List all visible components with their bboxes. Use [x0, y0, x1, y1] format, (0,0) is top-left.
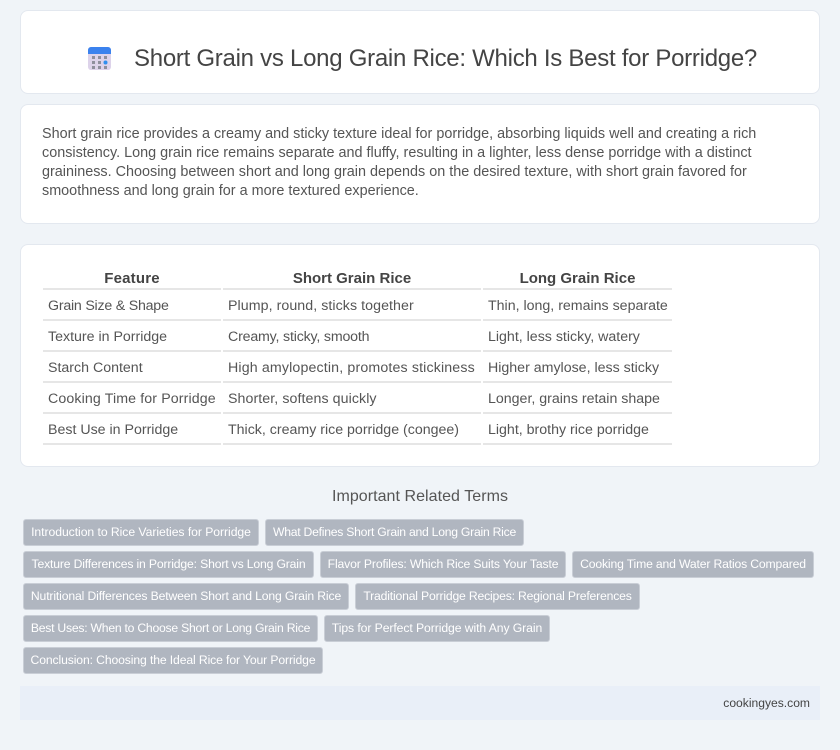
table row: starch	[48, 360, 659, 376]
table header	[104, 270, 635, 287]
tag list: What Defines Short Grain and Long Grain Rice	[273, 525, 516, 539]
table row: texture: Texture in Porridge	[48, 329, 167, 345]
table header: Long Grain Rice	[520, 270, 635, 287]
panel: title header	[20, 10, 820, 94]
table row: best use: Thick, creamy rice porridge (congee)	[228, 422, 459, 438]
table row: cooking time	[48, 391, 660, 407]
panel: introduction text: Short grain rice provides a creamy and sticky texture ideal for porridge, absorbing liquids well and creating a rich	[42, 126, 756, 142]
panel: introduction text: graininess. Choosing between short and long grain depends on the desired texture, with short grain favored for	[42, 164, 747, 180]
table row: best use	[48, 422, 649, 438]
tag list	[23, 519, 814, 674]
icon: calendar	[88, 47, 111, 70]
table row: starch: Higher amylose, less sticky	[488, 360, 659, 376]
table row: grain size	[48, 298, 668, 314]
table row: best use: Best Use in Porridge	[48, 422, 178, 438]
tag list: Cooking Time and Water Ratios Compared	[580, 557, 806, 571]
tag list: Nutritional Differences Between Short and Long Grain Rice	[31, 589, 341, 603]
panel: introduction text	[20, 104, 820, 224]
table row: cooking time: Cooking Time for Porridge	[48, 391, 216, 407]
table row: grain size: Thin, long, remains separate	[488, 298, 668, 314]
panel: introduction text: smoothness and long grain for a more textured experience.	[42, 183, 419, 199]
tag list: Traditional Porridge Recipes: Regional Preferences	[363, 589, 632, 603]
table row: texture: Creamy, sticky, smooth	[228, 329, 369, 345]
footer source: cookingyes.com	[723, 696, 810, 710]
table row: texture	[48, 329, 640, 345]
tag list: Introduction to Rice Varieties for Porridge	[31, 525, 251, 539]
table row: starch: High amylopectin, promotes stickiness	[228, 360, 475, 376]
heading: related terms: Important Related Terms	[332, 488, 508, 505]
tag list: Flavor Profiles: Which Rice Suits Your Taste	[328, 557, 558, 571]
tag list: Texture Differences in Porridge: Short vs Long Grain	[32, 557, 305, 571]
table header: Short Grain Rice	[293, 270, 411, 287]
table row: grain size: Plump, round, sticks together	[228, 298, 414, 314]
table row: cooking time: Shorter, softens quickly	[228, 391, 377, 407]
footer bar	[20, 686, 820, 720]
tag list: Conclusion: Choosing the Ideal Rice for Your Porridge	[31, 653, 315, 667]
table header: Feature	[104, 270, 160, 287]
panel: comparison table	[20, 244, 820, 467]
tag list: Tips for Perfect Porridge with Any Grain	[332, 621, 542, 635]
table row: grain size: Grain Size & Shape	[48, 298, 169, 314]
table row: texture: Light, less sticky, watery	[488, 329, 640, 345]
table row: best use: Light, brothy rice porridge	[488, 422, 649, 438]
panel: introduction text: consistency. Long grain rice remains separate and fluffy, resulting in a lighter, less dense porridge with a distinct	[42, 145, 752, 161]
table row: starch: Starch Content	[48, 360, 143, 376]
tag list: Best Uses: When to Choose Short or Long Grain Rice	[31, 621, 310, 635]
table row: cooking time: Longer, grains retain shape	[488, 391, 660, 407]
title: Short Grain vs Long Grain Rice: Which Is Best for Porridge?	[134, 45, 757, 72]
